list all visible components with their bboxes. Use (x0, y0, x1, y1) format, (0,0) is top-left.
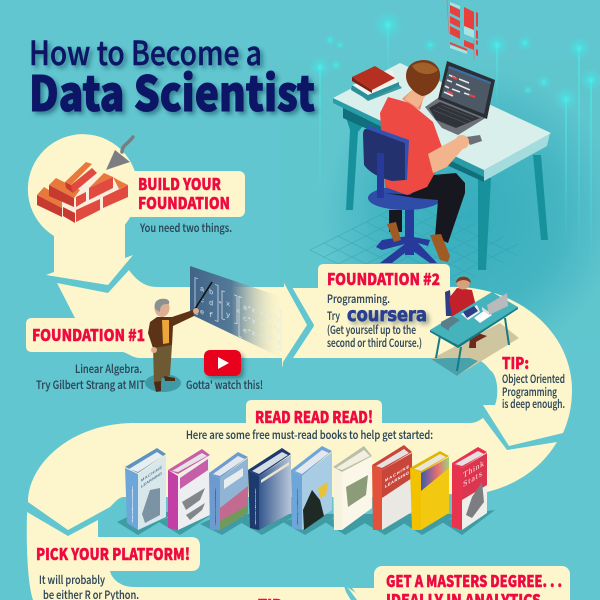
title (29, 27, 315, 125)
logo: coursera: coursera (347, 304, 427, 326)
chair back (363, 125, 409, 198)
heading: build your foundation (138, 171, 230, 214)
laptop (425, 61, 495, 145)
text: linear algebra (36, 361, 145, 393)
panel: winding path ribbon (26, 134, 572, 600)
tip: object oriented programming (502, 350, 565, 412)
tip: object oriented programming: Programming (502, 384, 557, 400)
tip: object oriented programming: Object Oriented (502, 371, 565, 387)
illustration: data scientist at desk (333, 0, 551, 270)
chart: matrix board: c*x + d*y (243, 315, 281, 336)
text: programming (327, 291, 422, 351)
book: machine learning red: MACHINE (385, 464, 409, 483)
chart: matrix board: c (200, 297, 204, 306)
chart: matrix board: y (226, 311, 231, 321)
tip: object oriented programming: TIP: (502, 350, 529, 374)
book: think stats: Think (463, 458, 485, 480)
icon: professor (145, 282, 212, 392)
chart: matrix board: x (226, 300, 230, 309)
icon: bricks and trowel (37, 137, 133, 223)
chart: matrix board (190, 266, 282, 358)
chart: matrix board: f (209, 312, 213, 321)
chart: matrix board: = (236, 308, 240, 317)
heading: read read read: READ READ READ! (255, 404, 373, 428)
desk (333, 63, 551, 270)
text: r or python: It will probably (39, 572, 105, 588)
floor grid (310, 195, 518, 305)
book: statistical learning (402, 451, 458, 535)
book: think stats (442, 447, 495, 535)
book: python (159, 449, 216, 535)
text: you need two things: You need two things. (139, 220, 232, 236)
book: machine learning red (363, 445, 420, 535)
floating code panel (447, 0, 478, 60)
text: programming: (Get yourself up to the (327, 322, 416, 338)
book: deep learning (200, 452, 256, 535)
book: machine learning red: LEARNING (385, 470, 410, 489)
chart: matrix board: e (200, 309, 204, 318)
heading: masters degree: GET A MASTERS DEGREE. . . (386, 568, 562, 592)
book: machine learning: MACHINE LEARNING (132, 484, 133, 525)
heading: build your foundation: FOUNDATION (138, 190, 230, 214)
book: neural networks (240, 448, 298, 535)
heading: build your foundation: BUILD YOUR (138, 171, 221, 195)
book: programmer's guide (325, 446, 380, 535)
books on desk (351, 66, 402, 101)
book row (117, 445, 495, 535)
text: r or python (39, 572, 139, 600)
chart: matrix board: * (218, 301, 222, 310)
book: machine learning: MACHINE (141, 464, 162, 483)
text: programming: Programming. (327, 291, 390, 307)
title: How to Become a (29, 27, 262, 75)
chair base and seat (368, 186, 442, 263)
heading: foundation 2: FOUNDATION #2 (327, 266, 440, 290)
text: books intro: Here are some free must-read books to help get started: (186, 427, 433, 443)
text: linear algebra: Linear Algebra. (75, 361, 142, 377)
book: neural networks: Neural Networks (255, 486, 256, 527)
book: machine learning: LEARNING (141, 470, 163, 489)
book: mining massive datasets (283, 446, 340, 535)
illustration: person at small desk (430, 276, 519, 376)
tip: object oriented programming: is deep enough. (502, 396, 565, 412)
glowing data lights (309, 10, 600, 270)
heading: foundation 1: FOUNDATION #1 (32, 322, 145, 346)
text: gotta watch this: Gotta' watch this! (186, 377, 263, 393)
title: Data Scientist (29, 55, 315, 125)
chart: matrix board: d (209, 300, 213, 309)
icon: youtube play button (204, 350, 241, 376)
chart: matrix board: b (209, 289, 213, 298)
chart: matrix board: e*x + f*y (243, 327, 281, 348)
book: machine learning (117, 448, 176, 535)
book: think stats: Stats (463, 468, 483, 489)
text: programming: Try (327, 308, 340, 324)
heading: pick your platform: PICK YOUR PLATFORM! (36, 541, 190, 565)
book: deep learning: DEEP LEARNING (215, 486, 216, 527)
person (380, 60, 469, 262)
text: programming: second or third Course.) (327, 335, 422, 351)
heading: masters degree (386, 568, 562, 600)
chart: matrix board: a*x + b*y (243, 304, 281, 325)
chart: matrix board: a (200, 286, 205, 295)
text: linear algebra: Try Gilbert Strang at MIT (36, 377, 145, 393)
book: mining massive datasets: Mining of Massive (297, 486, 298, 527)
